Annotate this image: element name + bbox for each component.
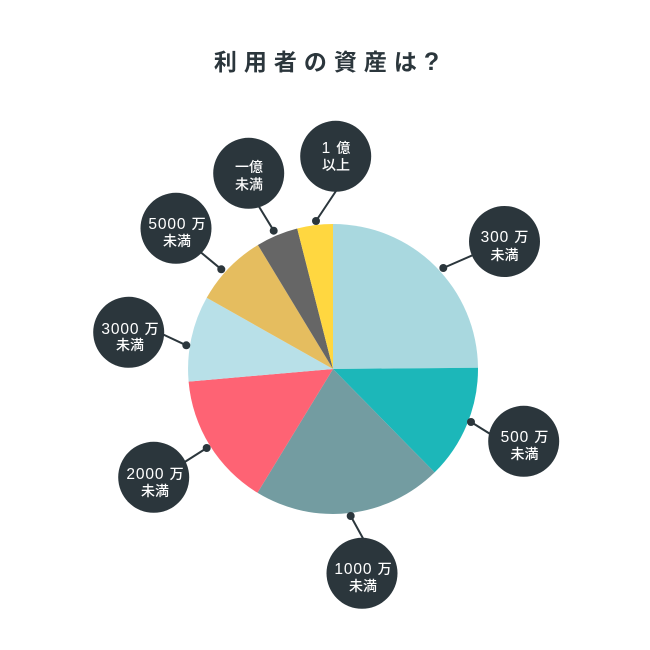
slice: 5000万未満 [207, 245, 333, 369]
callout: 3000万未満 [93, 297, 190, 368]
slice: 300万未満 [333, 224, 478, 369]
slice: 一億未満 [258, 228, 333, 369]
callout: 1億以上 [300, 121, 371, 225]
callout: 一億未満: 未満 [235, 176, 263, 192]
slice: 1億以上 [297, 224, 333, 369]
callout: 5000万未満 [140, 193, 225, 273]
callout: 500万未満 [467, 406, 559, 477]
callout: 300万未満: 300 万 [481, 229, 528, 246]
callout: 3000万未満: 3000 万 [101, 321, 159, 338]
callout: 5000万未満: 未満 [163, 233, 191, 249]
title: 利用者の資産は? [214, 48, 446, 76]
callout: 3000万未満: 未満 [116, 337, 144, 353]
slice: 500万未満 [333, 368, 478, 472]
callout: 1000万未満: 未満 [349, 578, 377, 594]
callout: 2000万未満: 未満 [141, 483, 169, 499]
callout: 300万未満 [439, 206, 540, 277]
callout: 2000万未満: 2000 万 [126, 466, 184, 483]
callout: 500万未満: 500 万 [501, 429, 548, 446]
callout: 1億以上: 1 億 [322, 140, 350, 157]
callout: 1000万未満 [326, 512, 398, 609]
slice: 1000万未満 [258, 369, 435, 514]
slice: 2000万未満 [189, 369, 333, 493]
callout: 5000万未満: 5000 万 [148, 216, 206, 233]
callout: 1000万未満: 1000 万 [334, 561, 392, 578]
callout: 一億未満 [213, 138, 284, 235]
callout: 300万未満: 未満 [490, 247, 518, 263]
callout: 一億未満: 一億 [235, 159, 263, 175]
callout: 2000万未満 [118, 442, 211, 513]
pie chart [188, 224, 478, 514]
callout: 1億以上: 以上 [322, 157, 350, 173]
slice: 3000万未満 [188, 298, 333, 382]
callout: 500万未満: 未満 [510, 446, 538, 462]
